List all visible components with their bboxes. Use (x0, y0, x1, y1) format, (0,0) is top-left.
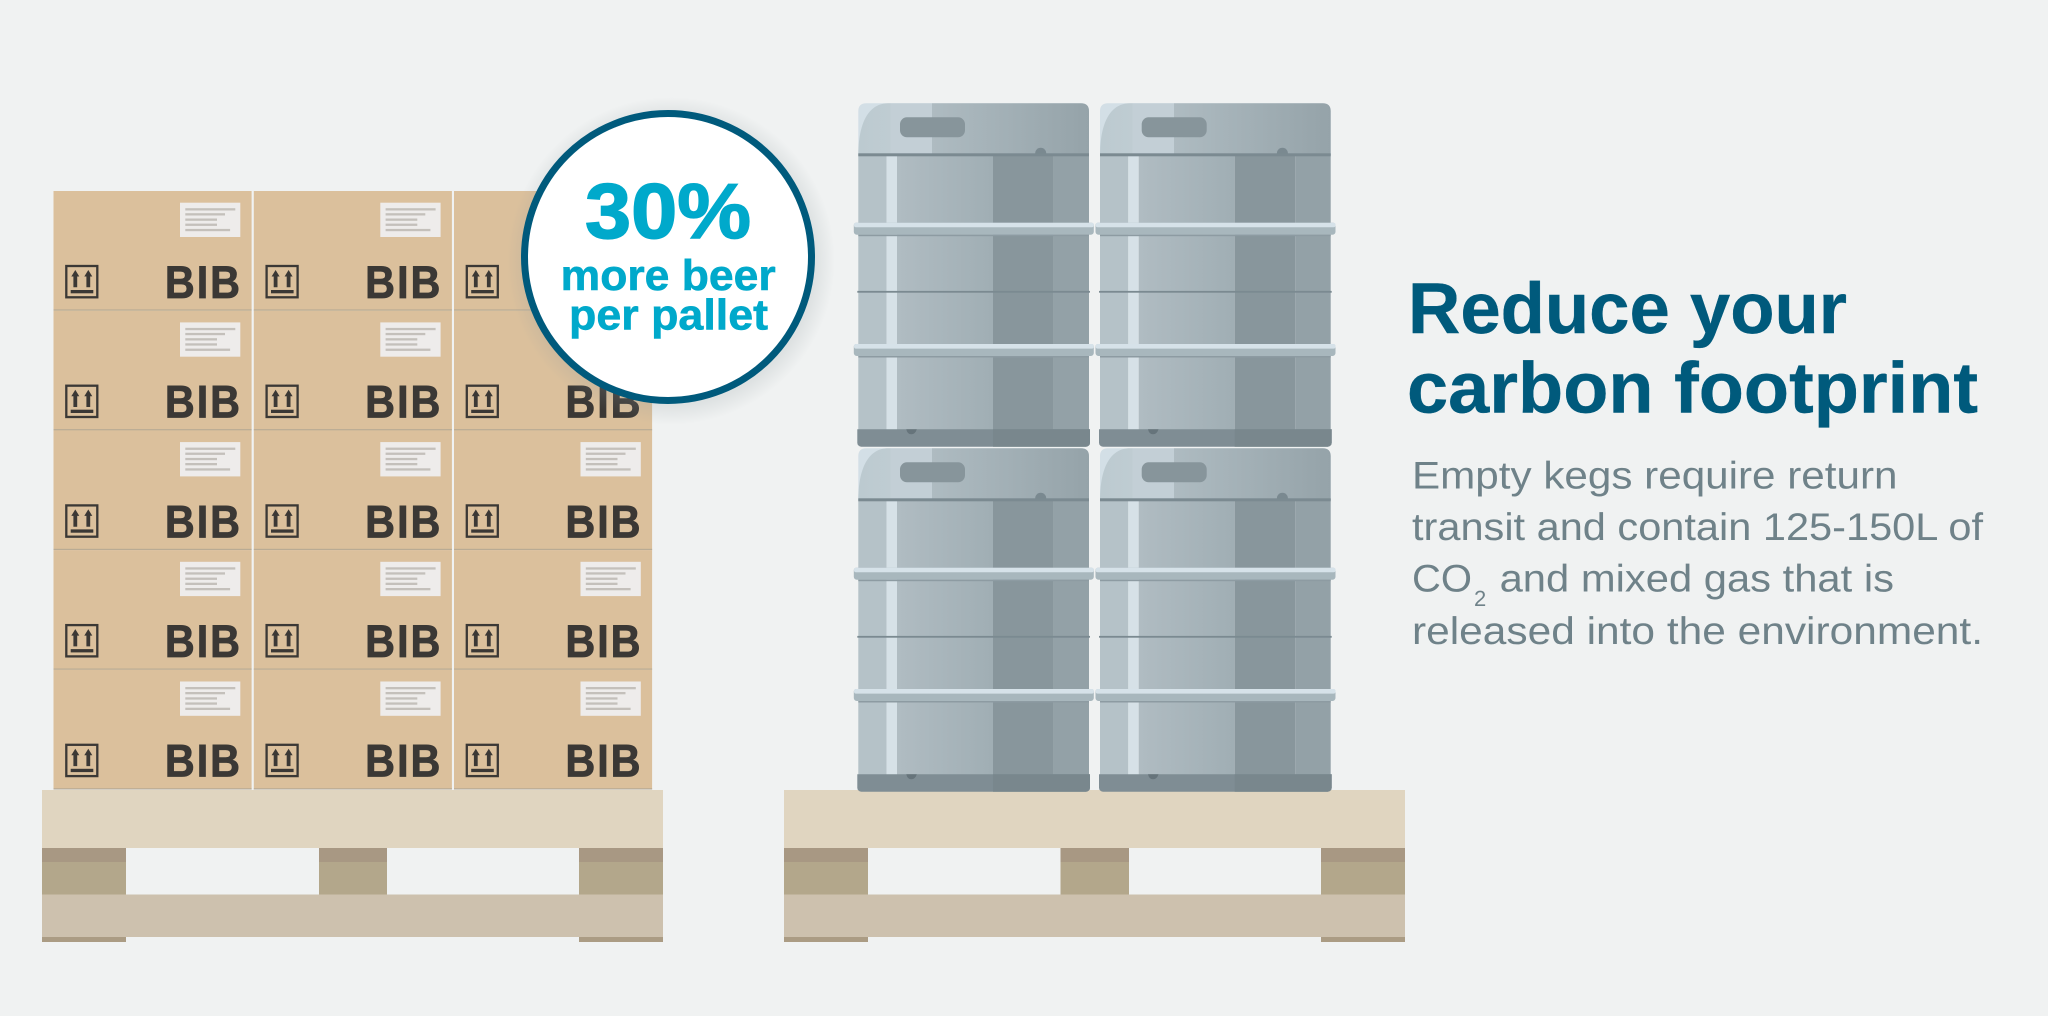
body text: released into the environment. (1412, 610, 1983, 653)
box row 2: BIB (365, 376, 440, 428)
box row 5: BIB (165, 735, 240, 787)
box row 5: BIB (565, 735, 641, 787)
body text: transit and contain 125-150L of (1412, 506, 1983, 549)
box row 3: BIB (365, 495, 440, 547)
box row 3: BIB (565, 495, 641, 547)
keg bottom right (1096, 448, 1336, 792)
callout caption: per pallet (569, 291, 768, 339)
box row 2: BIB (165, 376, 240, 428)
callout: 30% more beer per pallet (507, 97, 835, 425)
callout caption: more beer (561, 252, 776, 300)
body text: CO (1412, 558, 1472, 601)
body text (1412, 454, 1983, 653)
body text: Empty kegs require return (1412, 454, 1898, 497)
box row 4 (54, 550, 652, 670)
body text: 2 (1474, 586, 1486, 611)
heading: carbon footprint (1407, 348, 1978, 428)
callout percentage: 30% (585, 167, 751, 255)
keg top right (1096, 103, 1336, 447)
left pallet stacked with BIB boxes (42, 191, 663, 942)
box row 4: BIB (165, 615, 240, 667)
heading: Reduce your (1408, 269, 1847, 349)
callout caption (561, 252, 776, 339)
box row 2: BIB (565, 376, 641, 428)
box row 1: BIB (565, 256, 641, 308)
wooden pallet under kegs (784, 790, 1405, 942)
heading (1407, 269, 1978, 428)
box row 1: BIB (365, 256, 440, 308)
right pallet stacked with kegs (784, 103, 1405, 942)
body text: and mixed gas that is (1500, 558, 1894, 601)
box row 2 (54, 311, 652, 430)
box row 5: BIB (365, 735, 440, 787)
box row 4: BIB (565, 615, 641, 667)
box row 4: BIB (365, 615, 440, 667)
box row 3: BIB (165, 495, 240, 547)
wooden pallet under boxes (42, 790, 663, 942)
box row 1 (54, 191, 652, 311)
keg top left (854, 103, 1094, 447)
box row 5 (54, 670, 652, 790)
box row 1: BIB (165, 256, 240, 308)
keg bottom left (854, 448, 1094, 792)
box row 3 (54, 430, 652, 550)
